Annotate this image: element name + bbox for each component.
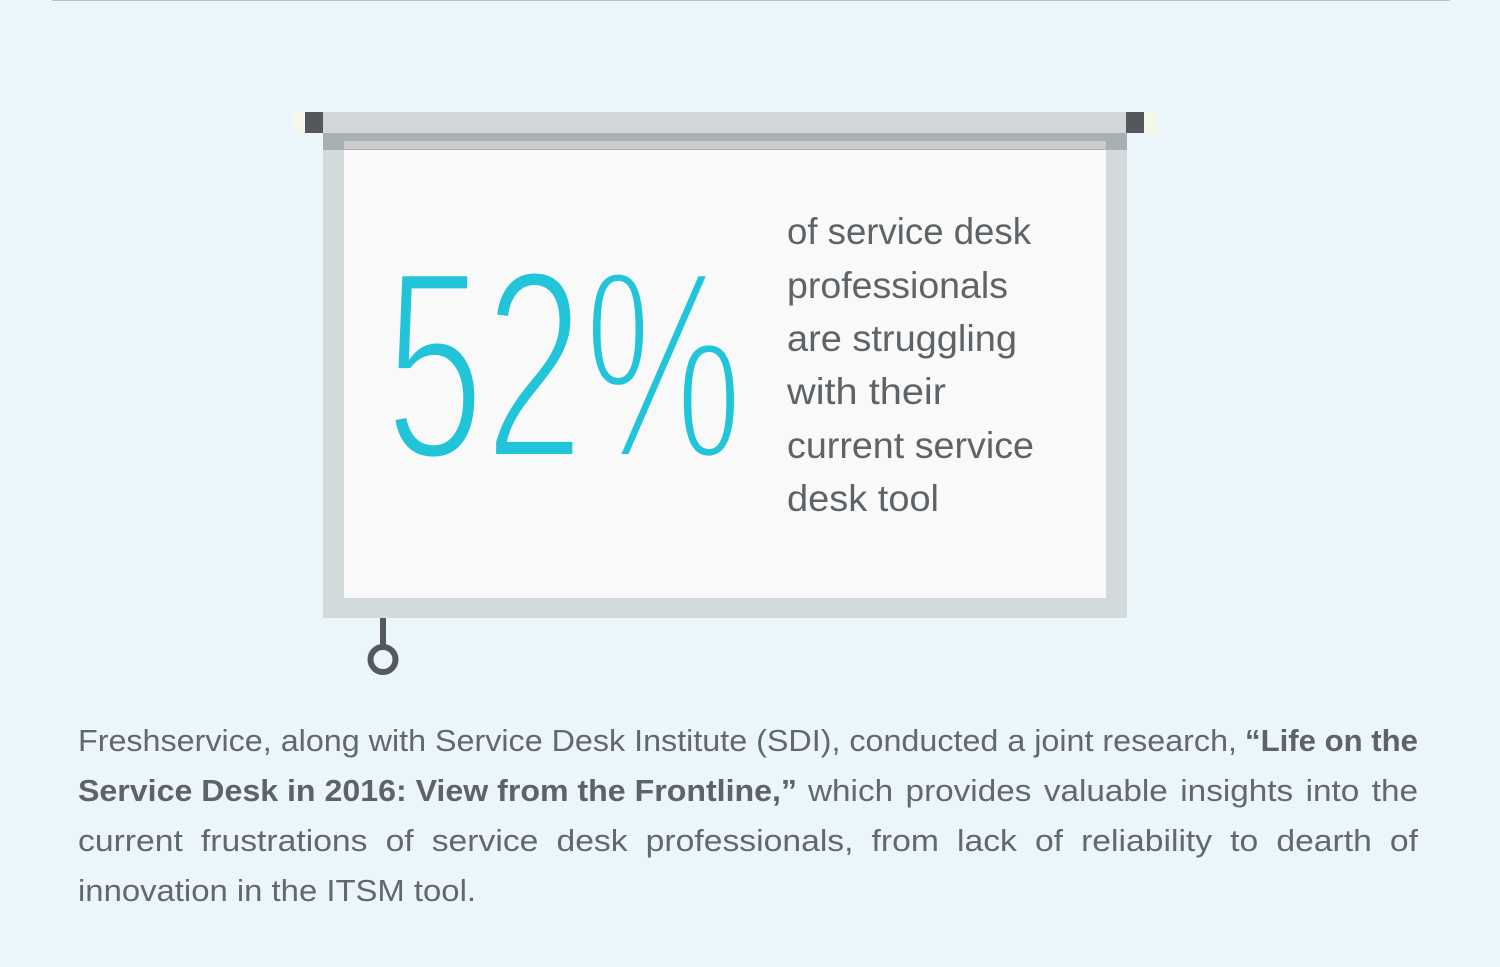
icon: projector screen bbox=[293, 112, 1158, 672]
left end glow bbox=[293, 112, 305, 134]
roller shadow bbox=[323, 133, 1127, 150]
research paragraph: current frustrations of service desk professionals, from lack of reliability to dearth of bbox=[78, 823, 1418, 858]
screen frame bbox=[323, 134, 1127, 618]
statistic description: of service desk bbox=[787, 211, 1031, 252]
right end glow bbox=[1144, 112, 1158, 134]
statistic description: with their bbox=[786, 371, 946, 412]
statistic description: desk tool bbox=[787, 478, 939, 519]
pull ring bbox=[370, 647, 396, 672]
research paragraph: innovation in the ITSM tool. bbox=[78, 873, 476, 908]
pull cord bbox=[380, 618, 386, 648]
roller shadow light band bbox=[344, 141, 1106, 149]
research paragraph: which provides valuable insights into the bbox=[807, 773, 1418, 808]
big statistic: 52% bbox=[385, 215, 743, 516]
research paragraph: Service Desk in 2016: View from the Frontline,” bbox=[78, 773, 797, 808]
statistic description: are struggling bbox=[787, 318, 1017, 359]
left bracket bbox=[305, 112, 323, 133]
statistic description: current service bbox=[787, 425, 1034, 466]
right bracket bbox=[1126, 112, 1144, 133]
roller bar bbox=[323, 112, 1127, 134]
research paragraph bbox=[78, 723, 1418, 908]
statistic description: professionals bbox=[787, 265, 1008, 306]
screen surface bbox=[344, 149, 1106, 598]
research paragraph: Freshservice, along with Service Desk Institute (SDI), conducted a joint research, bbox=[78, 723, 1237, 758]
research paragraph: “Life on the bbox=[1245, 723, 1418, 758]
statistic description bbox=[786, 211, 1034, 519]
